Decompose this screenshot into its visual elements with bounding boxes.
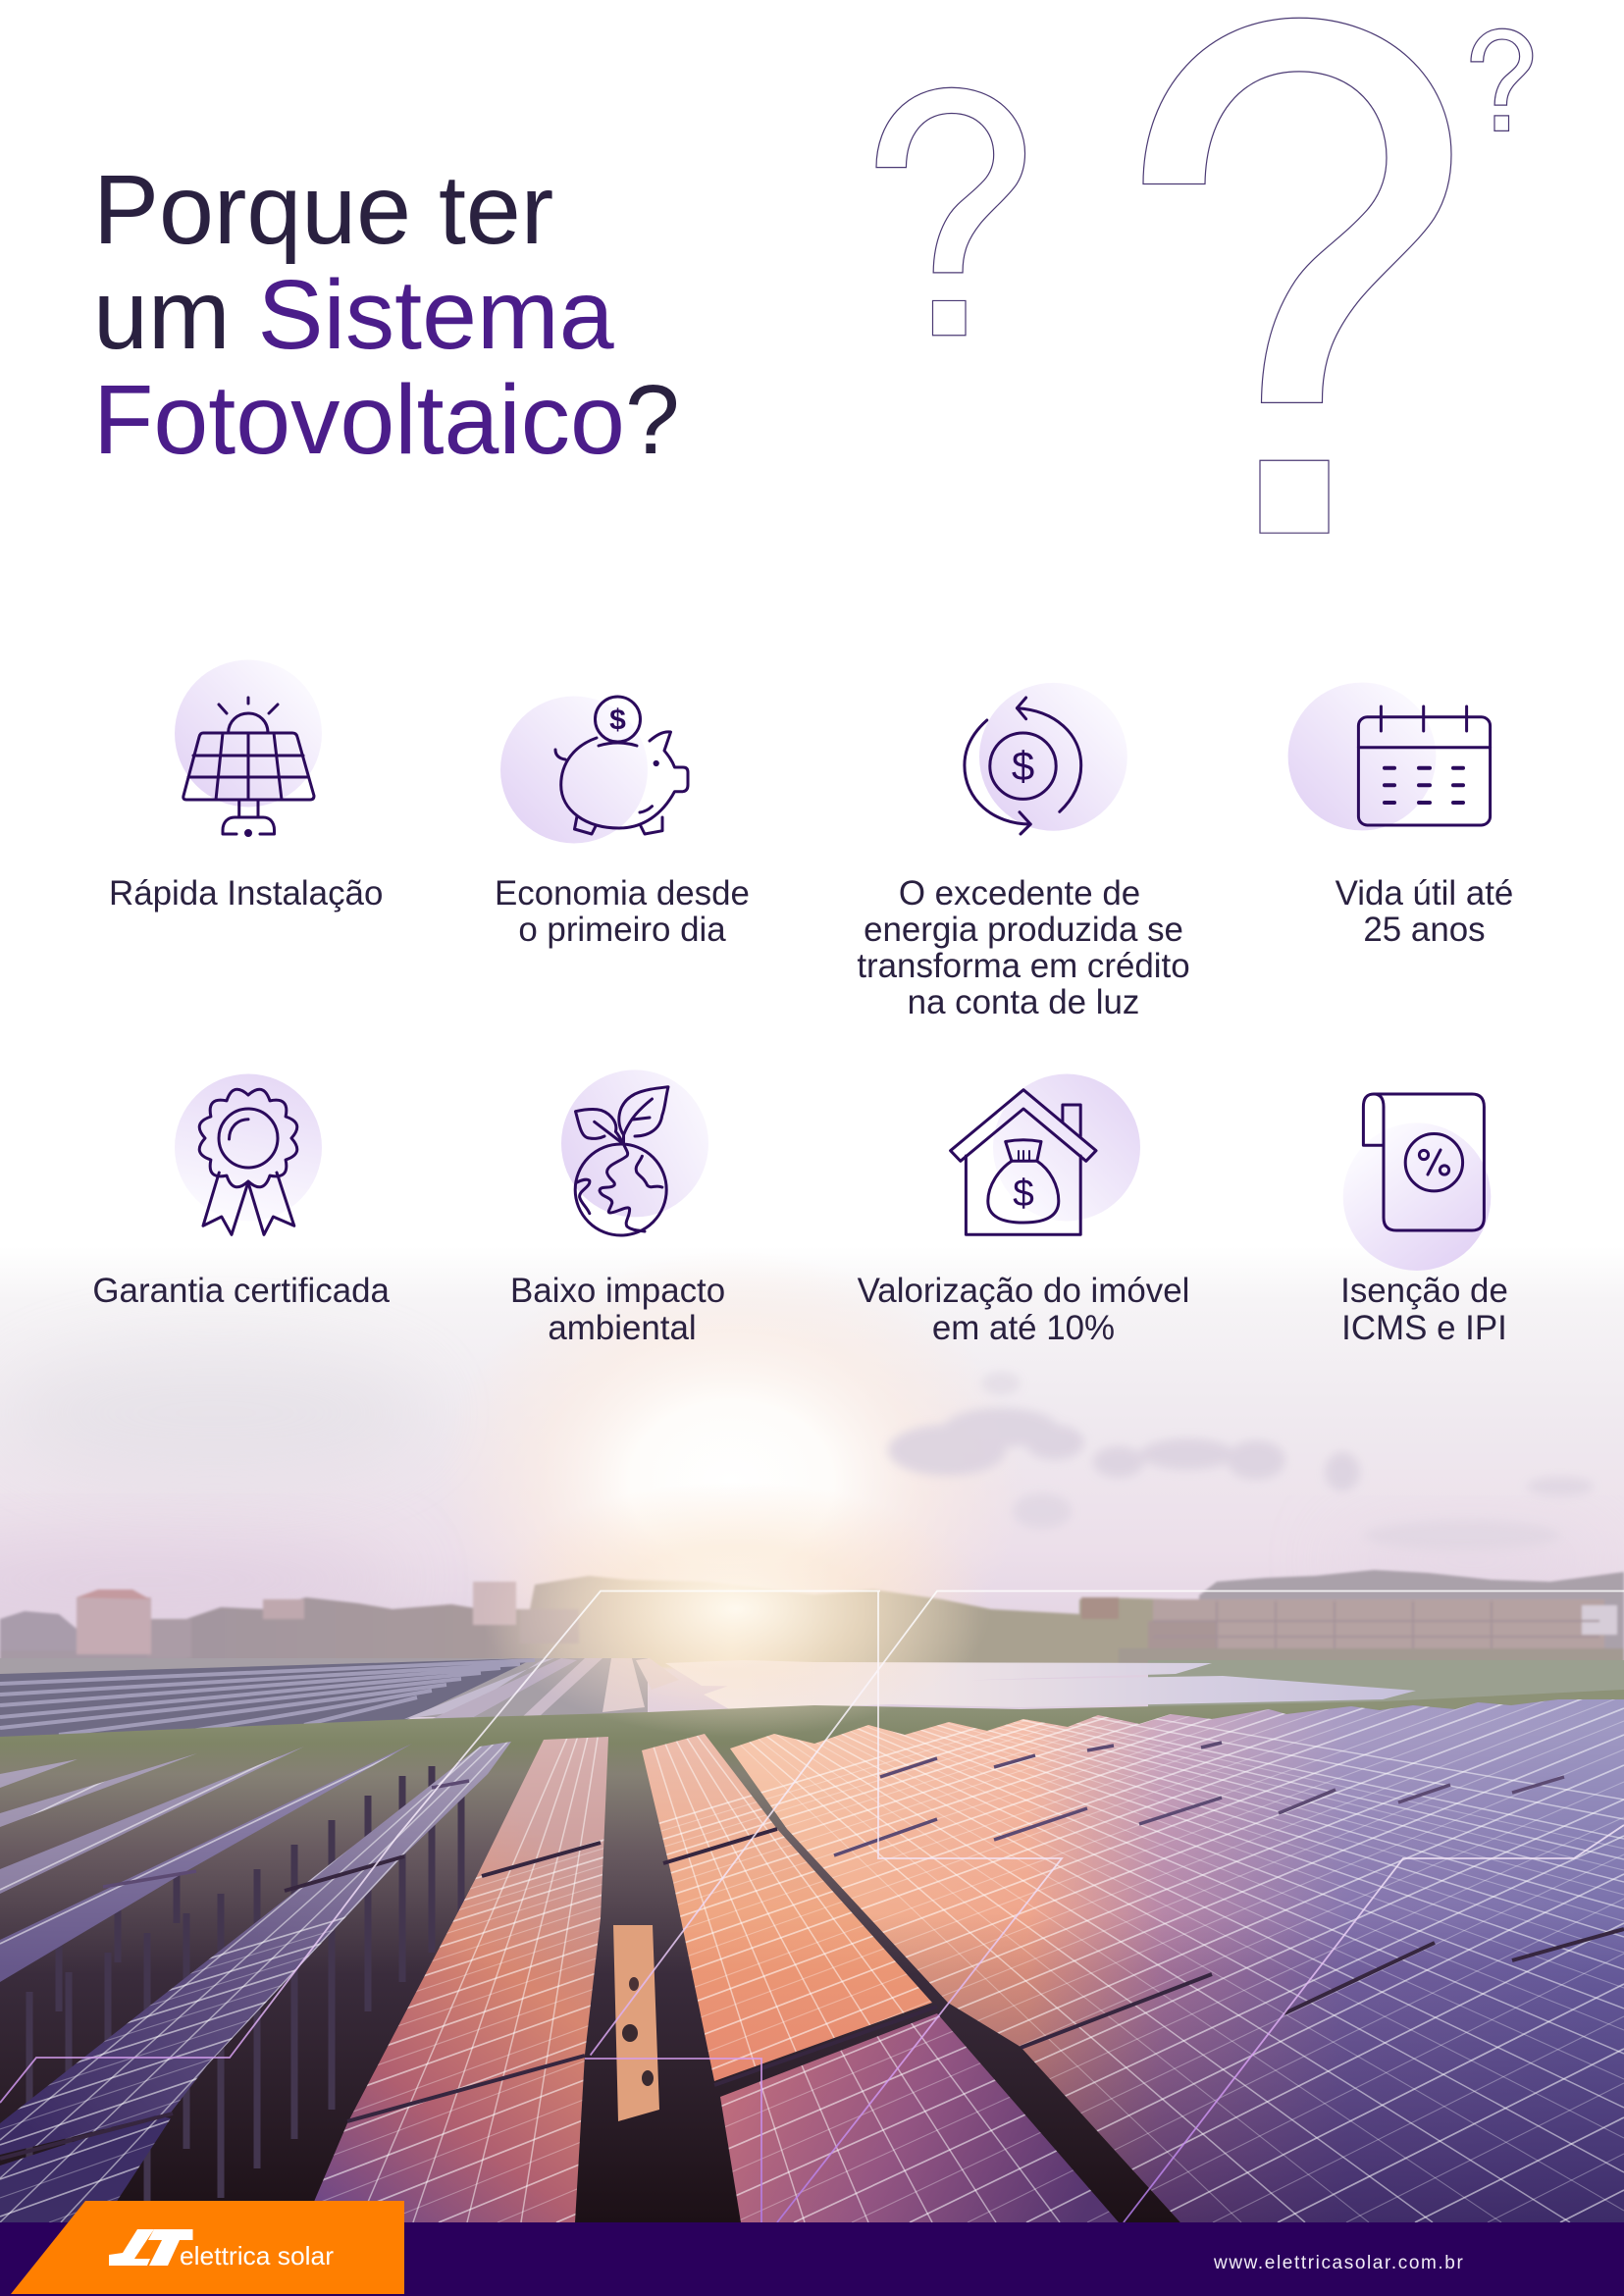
- benefit: tax exemption: [1340, 1094, 1508, 1347]
- icon: cycle of money: $: [1012, 743, 1034, 789]
- icon: award ribbon: [199, 1089, 297, 1234]
- label: Valorização do imóvel: [858, 1272, 1189, 1310]
- label: O excedente de: [899, 874, 1140, 913]
- logo block: [11, 2201, 404, 2294]
- label: Garantia certificada: [92, 1272, 391, 1310]
- thin light lines: [0, 1592, 1624, 2222]
- question mark large: [1143, 18, 1451, 533]
- sun glow: [481, 1482, 991, 1737]
- icon: piggy bank: [555, 697, 688, 834]
- benefit: low environmental impact: [510, 1070, 725, 1347]
- footer bar: [0, 2222, 1624, 2296]
- benefit: 25 year lifespan: [1288, 683, 1513, 949]
- decorative question marks: [876, 18, 1533, 533]
- icon: piggy bank: $: [609, 704, 626, 736]
- benefit: 25 year lifespan: 25 anos: [1363, 911, 1486, 949]
- solar panels: [0, 1699, 1624, 2222]
- benefit: property value increase: em até 10%: [932, 1309, 1115, 1347]
- support poles: [29, 1761, 461, 2222]
- website: www.elettricasolar.com.br: [1213, 2253, 1464, 2273]
- ground and grass: [0, 1690, 1624, 2222]
- benefit: certified warranty: [92, 1073, 391, 1310]
- treeline and buildings: [0, 1570, 1624, 1668]
- logo wordmark: elettrica solar: [180, 2241, 334, 2270]
- logo mark: [109, 2229, 192, 2266]
- icon: percent document: [1363, 1094, 1484, 1230]
- benefit: savings from the first day: o primeiro dia: [518, 911, 726, 949]
- title: Fotovoltaico?: [93, 365, 680, 475]
- panel row gaps lower: [0, 1829, 1624, 2159]
- title: Porque ter: [93, 155, 553, 265]
- benefit: low environmental impact: ambiental: [548, 1309, 697, 1347]
- icon: house with money bag: [951, 1090, 1096, 1234]
- question mark small: [1471, 28, 1533, 130]
- icon: solar panel: [183, 698, 314, 836]
- distant fields: [0, 1658, 1624, 1739]
- label: Isenção de: [1340, 1272, 1508, 1310]
- benefit: quick installation: [109, 659, 383, 913]
- question mark medium: [876, 87, 1025, 336]
- benefit: surplus energy credit: energia produzida se: [864, 911, 1183, 949]
- icon: calendar: [1358, 706, 1491, 825]
- label: Rápida Instalação: [109, 874, 383, 913]
- photo: solar farm at sunset: [0, 1246, 1624, 2222]
- benefit: property value increase: [858, 1073, 1189, 1347]
- clouds: [888, 1372, 1594, 1550]
- water reflection: [613, 1925, 659, 2121]
- benefit: savings from the first day: [495, 697, 750, 949]
- title: um Sistema: [93, 260, 614, 370]
- label: Baixo impacto: [510, 1272, 725, 1310]
- benefit: surplus energy credit: [857, 683, 1190, 1021]
- benefit: tax exemption: ICMS e IPI: [1341, 1309, 1507, 1347]
- panel grid: [0, 1699, 1624, 2222]
- label: Vida útil até: [1336, 874, 1513, 913]
- benefit: surplus energy credit: transforma em crédito: [857, 947, 1190, 985]
- sky: [0, 1246, 1624, 1737]
- icon: globe with leaves: [575, 1087, 668, 1235]
- benefit: surplus energy credit: na conta de luz: [908, 983, 1139, 1021]
- label: Economia desde: [495, 874, 750, 913]
- panel row gaps upper: [103, 1743, 1564, 1887]
- icon: house with money bag: $: [1013, 1173, 1034, 1215]
- icon: cycle of money: [965, 698, 1081, 834]
